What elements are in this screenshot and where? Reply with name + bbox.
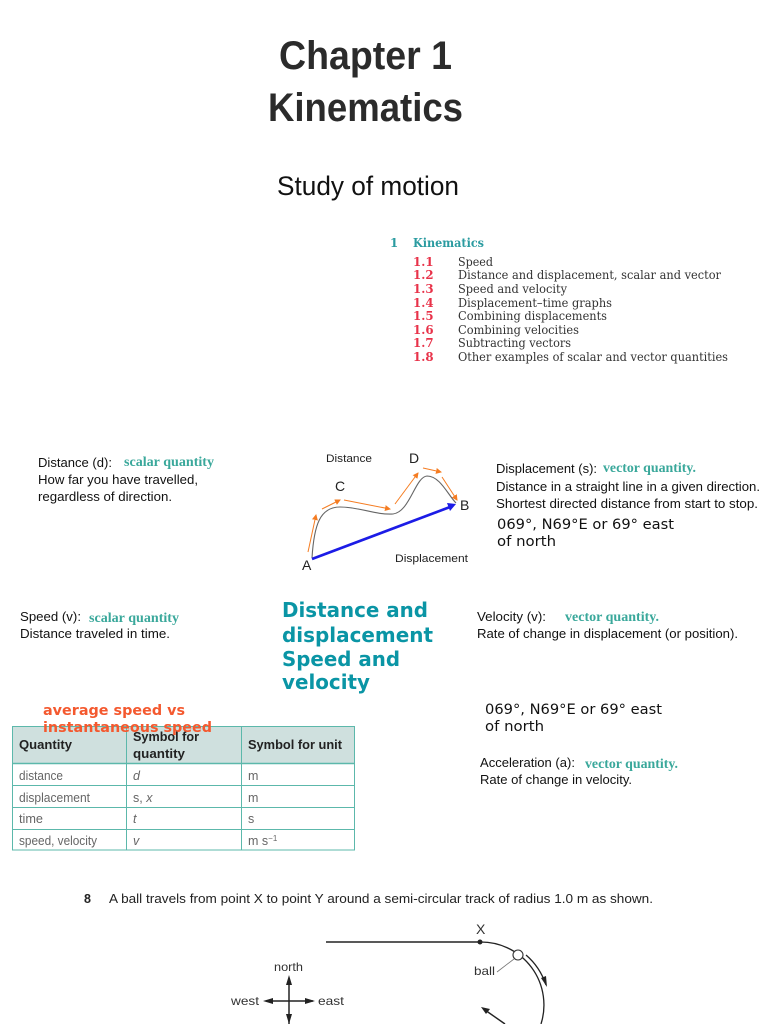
panel: contents list: Subtracting vectors [458, 336, 571, 350]
table: quantities and symbols: displacement [19, 791, 91, 805]
text block: acceleration definition [480, 755, 678, 787]
note: average speed vs instantaneous speed: instantaneous speed [43, 720, 212, 736]
text block: bearing note repeated [485, 702, 662, 735]
table: quantities and symbols: m [248, 791, 258, 805]
table: quantities and symbols: time [19, 812, 43, 826]
text block: acceleration definition: Rate of change in velocity. [480, 772, 632, 787]
panel: contents list [390, 236, 728, 364]
table: quantities and symbols: quantity [133, 747, 185, 761]
subtitle: Study of motion [277, 171, 459, 201]
table: quantities and symbols: Quantity [19, 738, 72, 752]
table: quantities and symbols: s, x [133, 791, 153, 805]
diagram: distance versus displacement path: C [335, 478, 345, 494]
title: Kinematics [268, 86, 463, 130]
panel: contents list: Distance and displacement, scalar and vector [458, 268, 721, 282]
text block: bearing note: 069°, N69°E or 69° east [497, 517, 674, 533]
panel: contents list: 1.6 [413, 323, 434, 337]
title: Chapter 1 [279, 34, 452, 78]
text block: displacement definition: vector quantity. [603, 460, 696, 475]
text block: distance definition: Distance (d): [38, 455, 112, 470]
diagram: compass directions: east [318, 994, 345, 1008]
diagram: compass directions [230, 960, 345, 1024]
table: quantities and symbols: −1 [268, 834, 278, 843]
panel: contents list: Speed and velocity [458, 282, 567, 296]
text block: distance definition: scalar quantity [124, 454, 214, 469]
panel: contents list: Other examples of scalar and vector quantities [458, 350, 728, 364]
text block: bearing note [497, 517, 674, 550]
text block: bearing note repeated: of north [485, 719, 544, 735]
table: quantities and symbols: d [133, 769, 141, 783]
panel: contents list: Combining displacements [458, 309, 607, 323]
diagram: distance versus displacement path: Distance [326, 453, 372, 465]
panel: contents list: Speed [458, 255, 493, 269]
panel: contents list: 1.5 [413, 309, 434, 323]
table: quantities and symbols: Symbol for [133, 730, 199, 744]
text block: velocity definition: Velocity (v): [477, 609, 546, 624]
text block: distance definition: How far you have travelled, [38, 472, 198, 487]
panel: contents list: 1.8 [413, 350, 434, 364]
panel: contents list: 1.3 [413, 282, 434, 296]
text block: acceleration definition: vector quantity. [585, 756, 678, 771]
panel: contents list: Kinematics [413, 236, 484, 250]
text block: distance definition: regardless of direction. [38, 489, 172, 504]
text block: acceleration definition: Acceleration (a): [480, 755, 575, 770]
question 8 text: A ball travels from point X to point Y around a semi-circular track of radius 1.0 m as shown. [109, 891, 653, 906]
text block: bearing note: of north [497, 534, 556, 550]
diagram: semi-circular track with ball: X [476, 921, 486, 937]
table: quantities and symbols: Symbol for unit [248, 738, 343, 752]
text block: displacement definition [496, 460, 760, 511]
question 8 text: 8 [84, 892, 91, 906]
diagram: distance versus displacement path [302, 450, 469, 573]
text block: bearing note repeated: 069°, N69°E or 69° east [485, 702, 662, 718]
title [268, 34, 463, 130]
diagram: distance versus displacement path: Displacement [395, 553, 468, 565]
heading: distance and displacement, speed and velocity: Distance and [282, 598, 428, 622]
heading: distance and displacement, speed and velocity [282, 598, 433, 694]
table: quantities and symbols: t [133, 812, 137, 826]
table: quantities and symbols: speed, velocity [19, 834, 98, 848]
text block: velocity definition: vector quantity. [565, 609, 659, 624]
text block: velocity definition [477, 609, 738, 641]
table: quantities and symbols: distance [19, 769, 63, 783]
table: quantities and symbols: m [248, 769, 258, 783]
text block: speed definition: Distance traveled in time. [20, 626, 170, 641]
panel: contents list: Displacement–time graphs [458, 296, 612, 310]
heading: distance and displacement, speed and velocity: Speed and [282, 647, 400, 671]
panel: contents list: 1.4 [413, 296, 434, 310]
table: quantities and symbols: v [133, 834, 140, 848]
text block: speed definition: scalar quantity [89, 610, 179, 625]
table: quantities and symbols: m s [248, 834, 268, 848]
diagram: distance versus displacement path: A [302, 557, 312, 573]
panel: contents list: Combining velocities [458, 323, 579, 337]
table: quantities and symbols: s [248, 812, 254, 826]
text block: displacement definition: Distance in a straight line in a given direction. [496, 479, 760, 494]
text block: displacement definition: Shortest directed distance from start to stop. [496, 496, 758, 511]
diagram: compass directions: north [274, 960, 303, 974]
text block: speed definition [20, 609, 179, 641]
panel: contents list: 1.7 [413, 336, 434, 350]
note: average speed vs instantaneous speed: average speed vs [43, 703, 185, 719]
diagram: semi-circular track with ball: ball [474, 964, 495, 978]
diagram: semi-circular track with ball [326, 921, 547, 1024]
diagram: compass directions: west [230, 994, 260, 1008]
panel: contents list: 1.1 [413, 255, 434, 269]
diagram: distance versus displacement path: D [409, 450, 419, 466]
note: average speed vs instantaneous speed [43, 703, 212, 736]
panel: contents list: 1 [390, 236, 398, 250]
heading: distance and displacement, speed and velocity: velocity [282, 670, 370, 694]
text block: velocity definition: Rate of change in displacement (or position). [477, 626, 738, 641]
diagram: distance versus displacement path: B [460, 497, 469, 513]
text block: displacement definition: Displacement (s): [496, 461, 597, 476]
panel: contents list: 1.2 [413, 268, 434, 282]
text block: speed definition: Speed (v): [20, 609, 81, 624]
text block: distance definition [38, 454, 214, 504]
heading: distance and displacement, speed and velocity: displacement [282, 623, 433, 647]
table: quantities and symbols [12, 726, 355, 850]
